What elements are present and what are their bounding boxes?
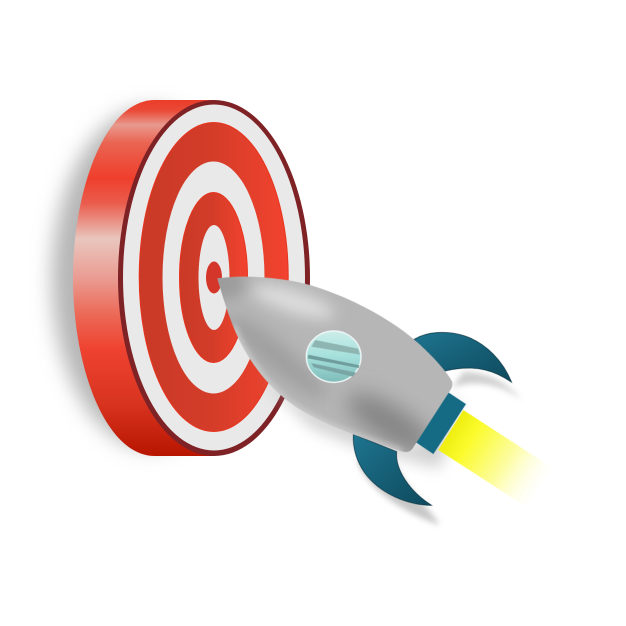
inner red ring [180, 192, 248, 362]
target [52, 100, 310, 456]
target face rim [118, 100, 310, 456]
red ring [139, 122, 288, 432]
white outer ring [123, 104, 305, 450]
rocket [218, 276, 546, 526]
illustration: rocket hitting target [40, 97, 546, 526]
upper fin [414, 332, 512, 382]
target shadow [52, 108, 248, 448]
rocket body [218, 276, 452, 452]
rocket shadows [260, 372, 522, 525]
white inner ring [198, 225, 230, 330]
bullseye [206, 262, 222, 294]
lower fin [353, 434, 432, 505]
flame [438, 410, 557, 506]
porthole window [306, 331, 361, 382]
white middle ring [162, 162, 264, 394]
target side wall [73, 100, 214, 456]
nozzle [415, 392, 466, 454]
